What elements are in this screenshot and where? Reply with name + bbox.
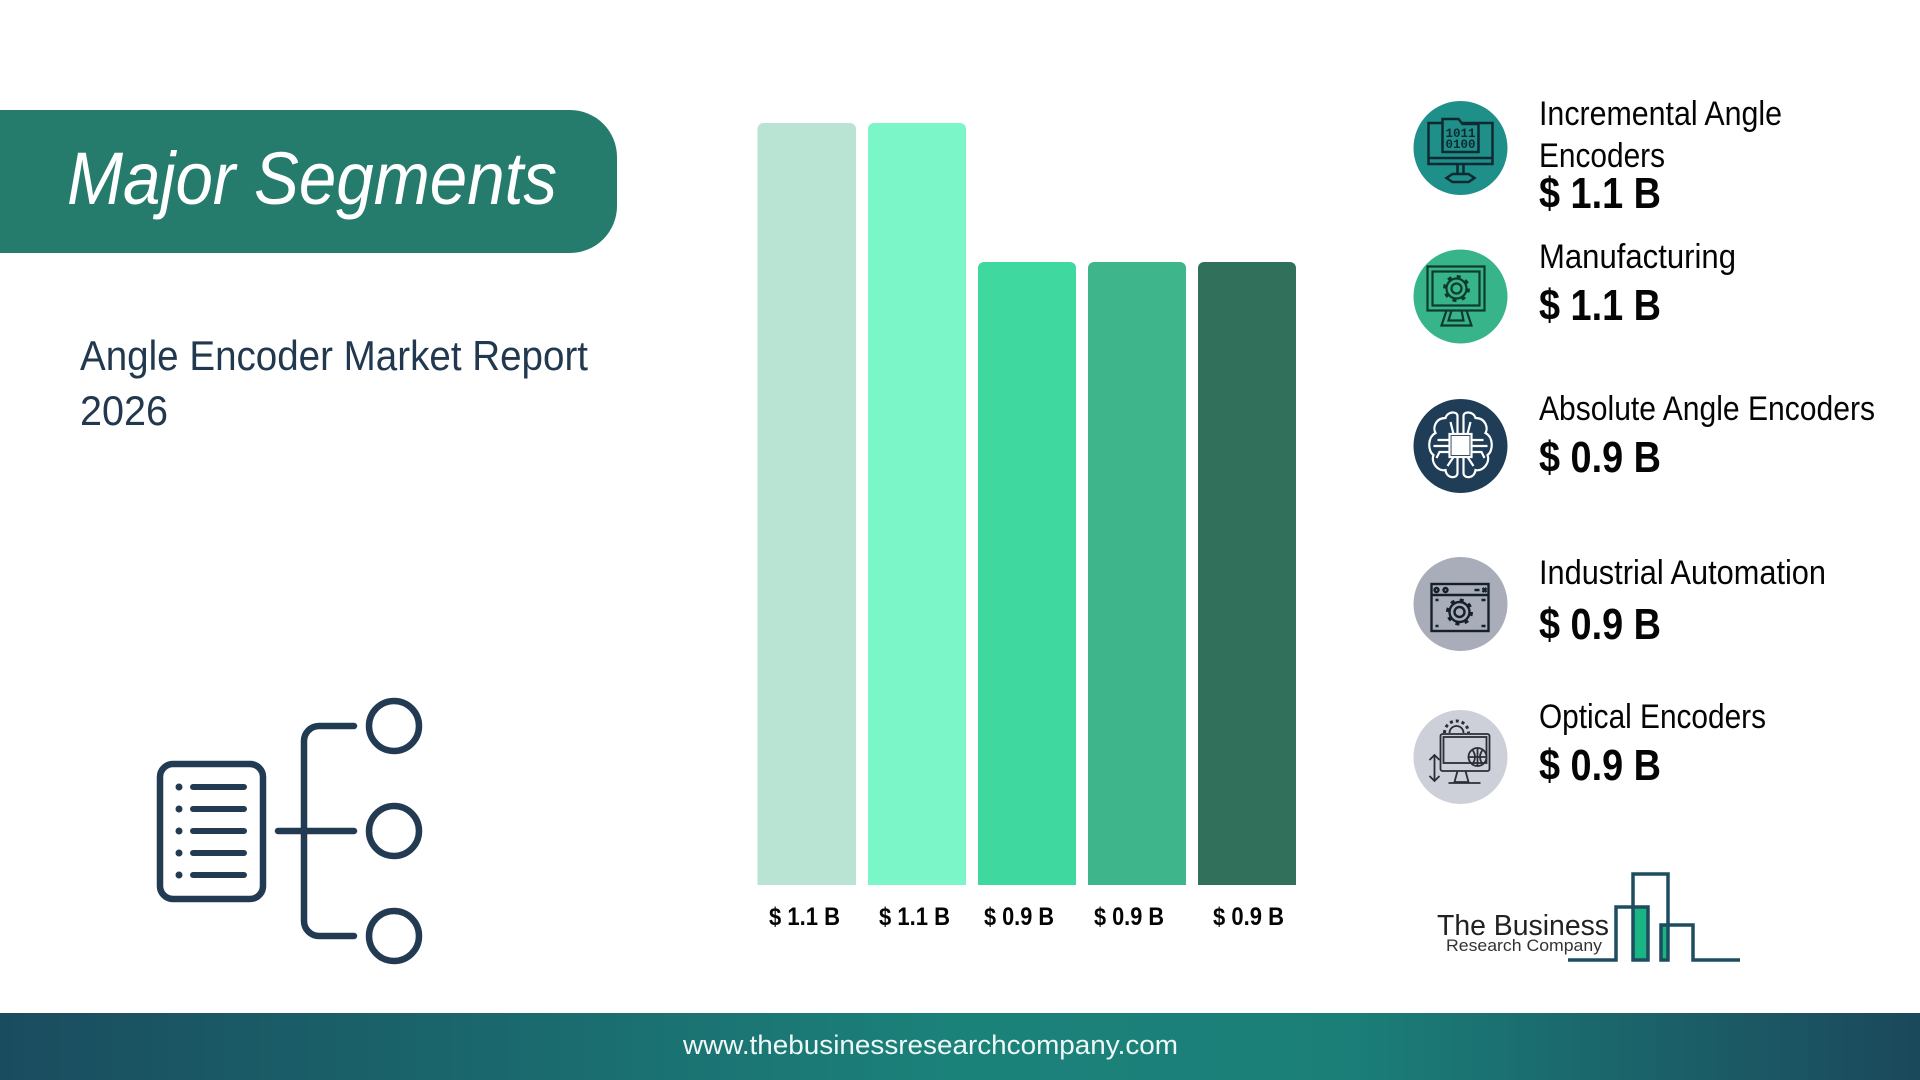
- icon: monitor with gear and globe: [1414, 710, 1508, 804]
- segment: Incremental Angle Encoders: $ 1.1 B: [1539, 169, 1661, 218]
- logo: The Business Research Company: [1437, 874, 1740, 960]
- bar: Optical Encoders: [1198, 262, 1296, 885]
- icon: binary folder monitor: [1414, 101, 1508, 195]
- footer bar: www.thebusinessresearchcompany.com: [682, 1030, 1178, 1060]
- segment: Incremental Angle Encoders: Incremental Angle: [1539, 95, 1782, 133]
- bar chart: [758, 123, 1296, 931]
- icon: gear monitor: [1414, 250, 1508, 344]
- segment: Manufacturing: [1414, 238, 1736, 344]
- segment: Absolute Angle Encoders: [1414, 390, 1875, 493]
- bar: Incremental Angle Encoders: [758, 123, 856, 885]
- logo: The Business Research Company: The Business: [1437, 910, 1609, 942]
- bar value labels: [769, 903, 1284, 931]
- subtitle: [80, 332, 588, 434]
- segment: Absolute Angle Encoders: Absolute Angle Encoders: [1539, 390, 1875, 428]
- segment: Incremental Angle Encoders: Encoders: [1539, 137, 1665, 175]
- segment: Industrial Automation: Industrial Automation: [1539, 554, 1826, 592]
- logo: The Business Research Company: Research Company: [1446, 937, 1603, 955]
- subtitle: 2026: [80, 387, 168, 434]
- subtitle: Angle Encoder Market Report: [80, 332, 588, 379]
- bar value labels: $ 0.9 B: [1094, 903, 1164, 931]
- icon: binary folder monitor: 0100: [1445, 138, 1476, 152]
- segment: Manufacturing: Manufacturing: [1539, 238, 1736, 276]
- segment: Incremental Angle Encoders: [1414, 95, 1782, 218]
- title banner: Major Segments: [67, 137, 557, 220]
- segment: Manufacturing: $ 1.1 B: [1539, 281, 1661, 330]
- icon: binary folder monitor: 1011: [1445, 127, 1476, 141]
- segment: Optical Encoders: [1414, 698, 1766, 804]
- bar: Absolute Angle Encoders: [978, 262, 1076, 885]
- icon: document with branching tree: [160, 701, 419, 961]
- segment: Optical Encoders: Optical Encoders: [1539, 698, 1766, 736]
- bar value labels: $ 1.1 B: [879, 903, 950, 931]
- bar value labels: $ 0.9 B: [1213, 903, 1284, 931]
- title banner: [0, 110, 617, 253]
- segment: Industrial Automation: $ 0.9 B: [1539, 600, 1661, 649]
- icon: AI brain chip: [1414, 399, 1508, 493]
- footer bar: [0, 1013, 1920, 1080]
- bar value labels: $ 1.1 B: [769, 903, 840, 931]
- bar value labels: $ 0.9 B: [984, 903, 1054, 931]
- segment: Industrial Automation: [1414, 554, 1826, 651]
- segment: Optical Encoders: $ 0.9 B: [1539, 741, 1661, 790]
- segment: Absolute Angle Encoders: $ 0.9 B: [1539, 433, 1661, 482]
- icon: gear browser window: [1414, 557, 1508, 651]
- bar: Manufacturing: [868, 123, 966, 885]
- bar: Industrial Automation: [1088, 262, 1186, 885]
